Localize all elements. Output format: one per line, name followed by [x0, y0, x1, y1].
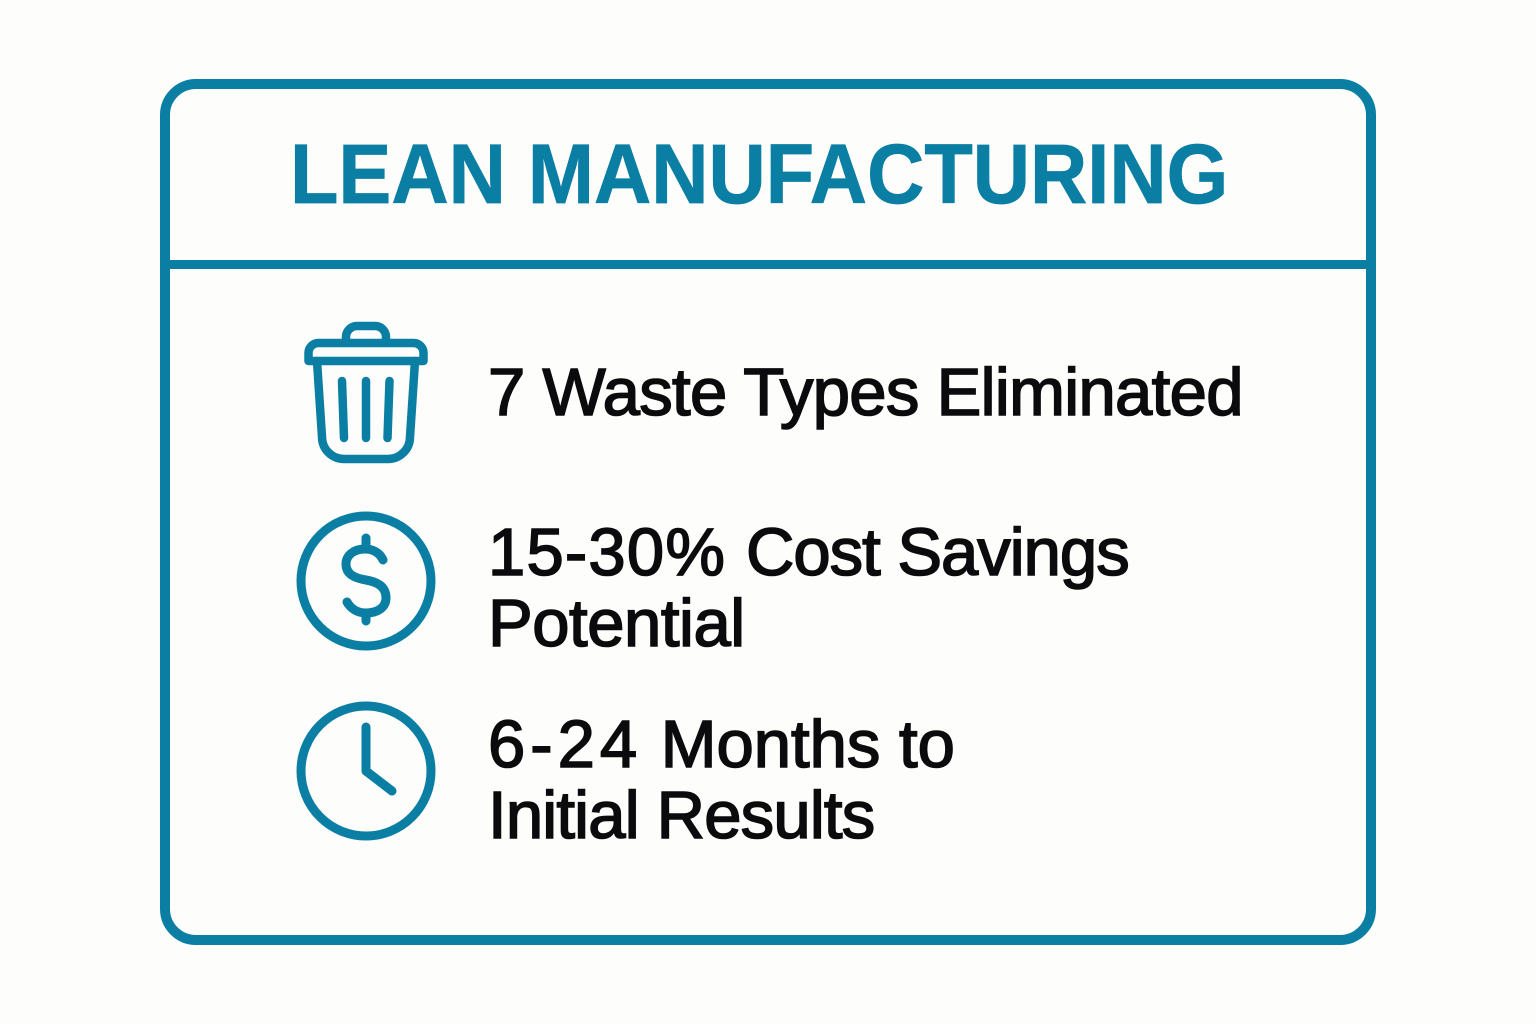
icon: dollar coin	[296, 512, 436, 650]
panel: lean manufacturing card	[160, 79, 1376, 945]
text: months to results	[488, 707, 955, 853]
icon: trash can	[304, 322, 428, 464]
text: months to results: Initial Results	[488, 778, 874, 853]
text: cost savings: Potential	[488, 586, 745, 661]
text: cost savings	[488, 515, 1129, 661]
title: LEAN MANUFACTURING	[290, 127, 1228, 221]
text: months to results: 6-24 Months to	[488, 707, 955, 782]
text: waste types: 7 Waste Types Eliminated	[488, 355, 1243, 430]
text: cost savings: 15-30% Cost Savings	[488, 515, 1129, 590]
icon: clock	[296, 702, 436, 840]
header divider	[165, 260, 1371, 269]
